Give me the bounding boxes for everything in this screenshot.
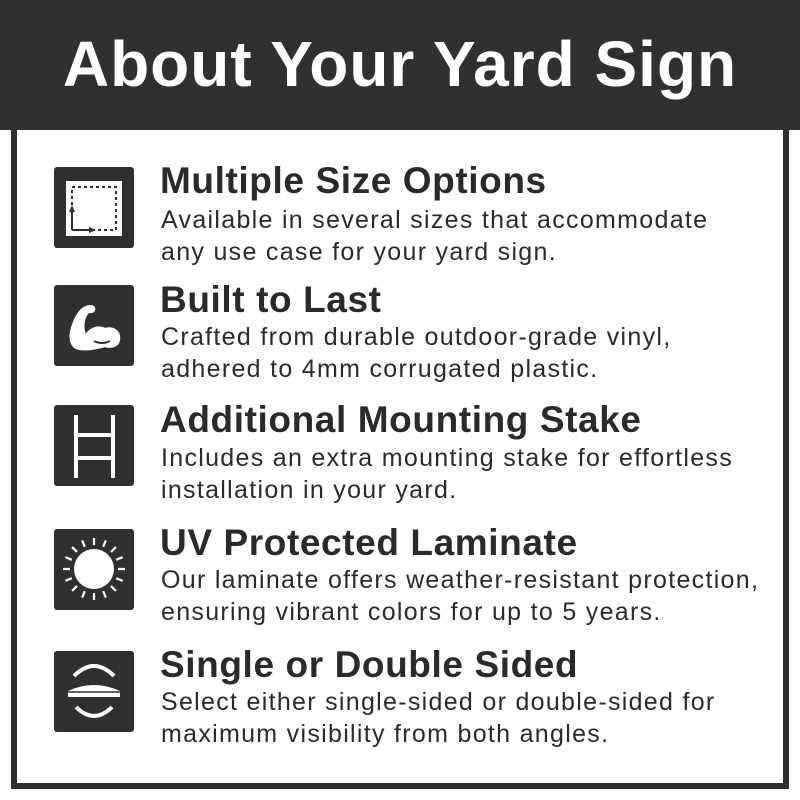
heading: stake: Additional Mounting Stake — [160, 399, 642, 440]
text: multiple size: Available in several sizes that accommodate — [161, 206, 708, 234]
heading: uv: UV Protected Laminate — [160, 522, 578, 563]
title: About Your Yard Sign — [63, 28, 737, 100]
icon: muscle arm — [54, 285, 134, 366]
text: stake — [161, 444, 733, 504]
text: uv: Our laminate offers weather-resistant protection, — [161, 566, 759, 594]
text: uv: ensuring vibrant colors for up to 5 years. — [161, 598, 662, 626]
icon: size options — [54, 167, 134, 248]
icon: double sided — [54, 651, 134, 732]
heading: sided: Single or Double Sided — [160, 644, 578, 685]
text: multiple size: any use case for your yard sign. — [161, 238, 557, 266]
text: sided — [161, 688, 716, 748]
text: built to last: Crafted from durable outdoor-grade vinyl, — [161, 323, 671, 351]
heading: multiple size: Multiple Size Options — [160, 160, 547, 201]
heading: built to last: Built to Last — [160, 279, 382, 320]
text: sided: maximum visibility from both angles. — [161, 720, 609, 748]
text: stake: Includes an extra mounting stake for effortless — [161, 444, 733, 472]
text: sided: Select either single-sided or double-sided for — [161, 688, 716, 716]
text: multiple size — [161, 206, 708, 266]
text: stake: installation in your yard. — [161, 476, 457, 504]
text: built to last — [161, 323, 671, 383]
icon: sun — [54, 529, 134, 610]
text: uv — [161, 566, 759, 626]
text: built to last: adhered to 4mm corrugated plastic. — [161, 355, 598, 383]
icon: stake — [54, 405, 134, 486]
title — [0, 0, 800, 130]
